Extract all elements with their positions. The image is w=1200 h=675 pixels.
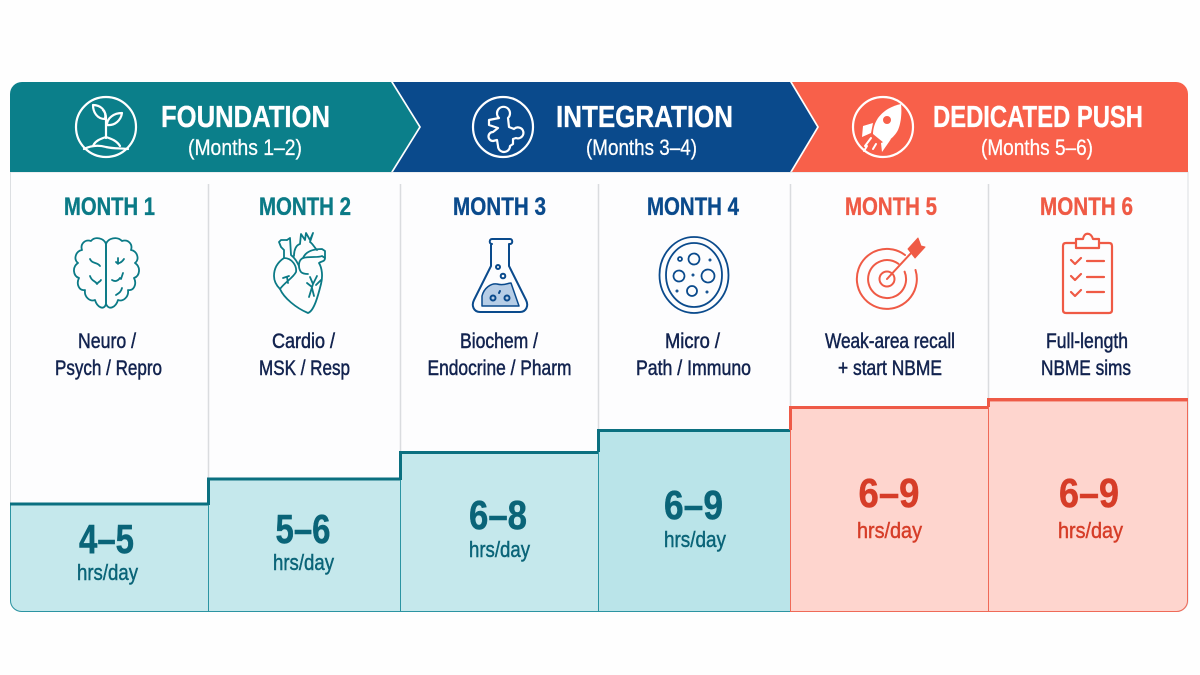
month label: MONTH 3	[453, 193, 546, 221]
subjects: + start NBME	[838, 356, 942, 380]
hours unit: hrs/day	[469, 537, 531, 562]
hours value: 5–6	[276, 506, 330, 552]
step bar	[790, 408, 988, 612]
icon: sprout in circle	[76, 97, 136, 157]
hours value: 6–9	[664, 482, 723, 528]
month label: MONTH 2	[259, 193, 351, 221]
subjects: Psych / Repro	[55, 356, 162, 380]
hours unit: hrs/day	[77, 560, 139, 585]
icon: target with arrow	[857, 238, 925, 309]
subjects: Weak-area recall	[825, 329, 955, 353]
subjects: Cardio /	[272, 329, 335, 353]
month label: MONTH 5	[845, 193, 937, 221]
icon: flask	[473, 239, 527, 312]
subjects: Full-length	[1046, 329, 1128, 353]
icon: heart	[274, 233, 325, 313]
subjects: Path / Immuno	[636, 356, 751, 380]
column: month 6	[988, 193, 1188, 612]
column: month 2	[208, 193, 400, 612]
column: month 4	[598, 193, 790, 612]
subjects: Neuro /	[78, 329, 136, 353]
panel: foundation header	[10, 82, 419, 172]
column: month 5	[790, 193, 988, 612]
panel: integration header	[393, 82, 817, 172]
icon: petri dish	[660, 237, 728, 313]
step bar	[10, 504, 208, 612]
subheading: months 1-2: (Months 1–2)	[188, 135, 302, 160]
hours value: 4–5	[79, 516, 134, 562]
icon: clipboard checklist	[1063, 234, 1112, 313]
hours unit: hrs/day	[664, 527, 727, 552]
month label: MONTH 1	[64, 193, 155, 221]
step bar	[988, 400, 1188, 612]
main card	[10, 172, 1188, 612]
subjects: NBME sims	[1041, 356, 1131, 380]
icon: rocket in circle	[853, 97, 913, 157]
subjects: Micro /	[665, 329, 720, 353]
hours unit: hrs/day	[1058, 518, 1124, 543]
heading: foundation: FOUNDATION	[161, 99, 330, 134]
subjects: MSK / Resp	[259, 356, 350, 380]
hours unit: hrs/day	[273, 550, 335, 575]
column: month 3	[400, 193, 598, 612]
hours value: 6–9	[858, 470, 920, 516]
step bar	[400, 452, 598, 612]
month label: MONTH 6	[1040, 193, 1133, 221]
step bar	[208, 479, 400, 612]
column: month 1	[10, 193, 208, 612]
subheading: months 3-4: (Months 3–4)	[586, 135, 697, 160]
subjects: Endocrine / Pharm	[428, 356, 572, 380]
subjects: Biochem /	[460, 329, 538, 353]
month label: MONTH 4	[647, 193, 739, 221]
hours value: 6–9	[1059, 470, 1119, 516]
panel: dedicated push header	[792, 82, 1188, 172]
hours value: 6–8	[469, 492, 527, 538]
icon: puzzle piece in circle	[473, 97, 533, 157]
subheading: months 5-6: (Months 5–6)	[981, 135, 1093, 160]
step bar	[598, 430, 790, 612]
heading: integration: INTEGRATION	[556, 99, 733, 134]
heading: dedicated push: DEDICATED PUSH	[933, 99, 1143, 134]
icon: brain	[74, 238, 139, 308]
hours unit: hrs/day	[857, 518, 923, 543]
